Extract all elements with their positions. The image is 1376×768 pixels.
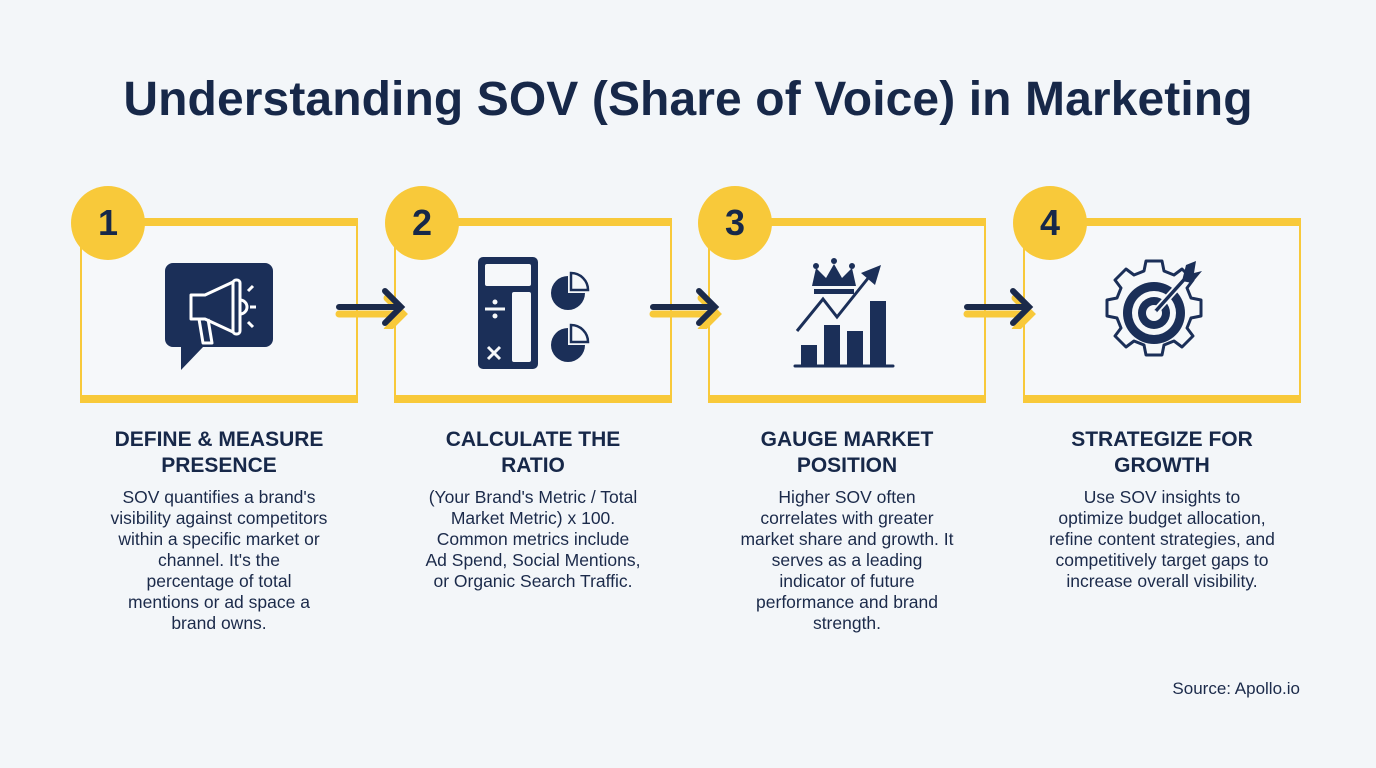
icon: crown and bar chart [794, 258, 894, 368]
text 2: Market Metric) x 100. [451, 508, 615, 528]
text 2: (Your Brand's Metric / Total [429, 487, 637, 507]
text 3: Higher SOV often [778, 487, 916, 507]
text 4: optimize budget allocation, [1058, 508, 1266, 528]
heading 1: PRESENCE [161, 454, 277, 477]
text 1: channel. It's the [158, 550, 280, 570]
heading 1 [115, 428, 323, 477]
text 3: indicator of future [779, 571, 915, 591]
heading 2 [446, 428, 620, 477]
heading 2: CALCULATE THE [446, 428, 620, 451]
panel: step 3 [708, 218, 986, 403]
text 2: Common metrics include [437, 529, 629, 549]
arrow 1 [336, 288, 408, 329]
panel: step 1 [80, 218, 358, 403]
text 3: strength. [813, 613, 881, 633]
text 4: refine content strategies, and [1049, 529, 1275, 549]
number 1 [71, 186, 145, 260]
number 2: 2 [412, 202, 432, 243]
panel: step 4 [1023, 218, 1301, 403]
number 1: 1 [98, 202, 118, 243]
heading 1: DEFINE & MEASURE [115, 428, 323, 451]
number 4: 4 [1040, 202, 1060, 243]
heading 4: GROWTH [1114, 454, 1210, 477]
heading 4 [1071, 428, 1253, 477]
icon: gear with target [1106, 260, 1202, 356]
text 4 [1049, 487, 1275, 591]
arrow 2 [650, 288, 722, 329]
heading 3: GAUGE MARKET [761, 428, 933, 451]
text 3: serves as a leading [772, 550, 922, 570]
text 1: visibility against competitors [111, 508, 327, 528]
text 1: SOV quantifies a brand's [122, 487, 316, 507]
text 2: or Organic Search Traffic. [433, 571, 633, 591]
text 3: performance and brand [756, 592, 938, 612]
text 4: increase overall visibility. [1066, 571, 1258, 591]
text 1: brand owns. [171, 613, 267, 633]
heading 4: STRATEGIZE FOR [1071, 428, 1253, 451]
number 3: 3 [725, 202, 745, 243]
icon: megaphone speech bubble [165, 263, 273, 370]
icon: calculator and pie charts [478, 257, 590, 369]
number 4 [1013, 186, 1087, 260]
heading 3 [761, 428, 934, 477]
heading 3: POSITION [797, 454, 897, 477]
text 1: within a specific market or [118, 529, 320, 549]
text 1: percentage of total [147, 571, 291, 591]
text 4: competitively target gaps to [1055, 550, 1269, 570]
arrow 3 [964, 288, 1036, 329]
text 3: market share and growth. It [740, 529, 954, 549]
title: Understanding SOV (Share of Voice) in Marketing [123, 73, 1253, 126]
text 4: Use SOV insights to [1084, 487, 1240, 507]
number 3 [698, 186, 772, 260]
text 2 [426, 487, 640, 591]
number 2 [385, 186, 459, 260]
text 2: Ad Spend, Social Mentions, [426, 550, 640, 570]
panel: step 2 [394, 218, 672, 403]
text 3: correlates with greater [760, 508, 934, 528]
heading 2: RATIO [501, 454, 565, 477]
text 3 [740, 487, 954, 633]
source: Source: Apollo.io [1172, 679, 1300, 698]
text 1: mentions or ad space a [128, 592, 310, 612]
text 1 [110, 487, 327, 633]
